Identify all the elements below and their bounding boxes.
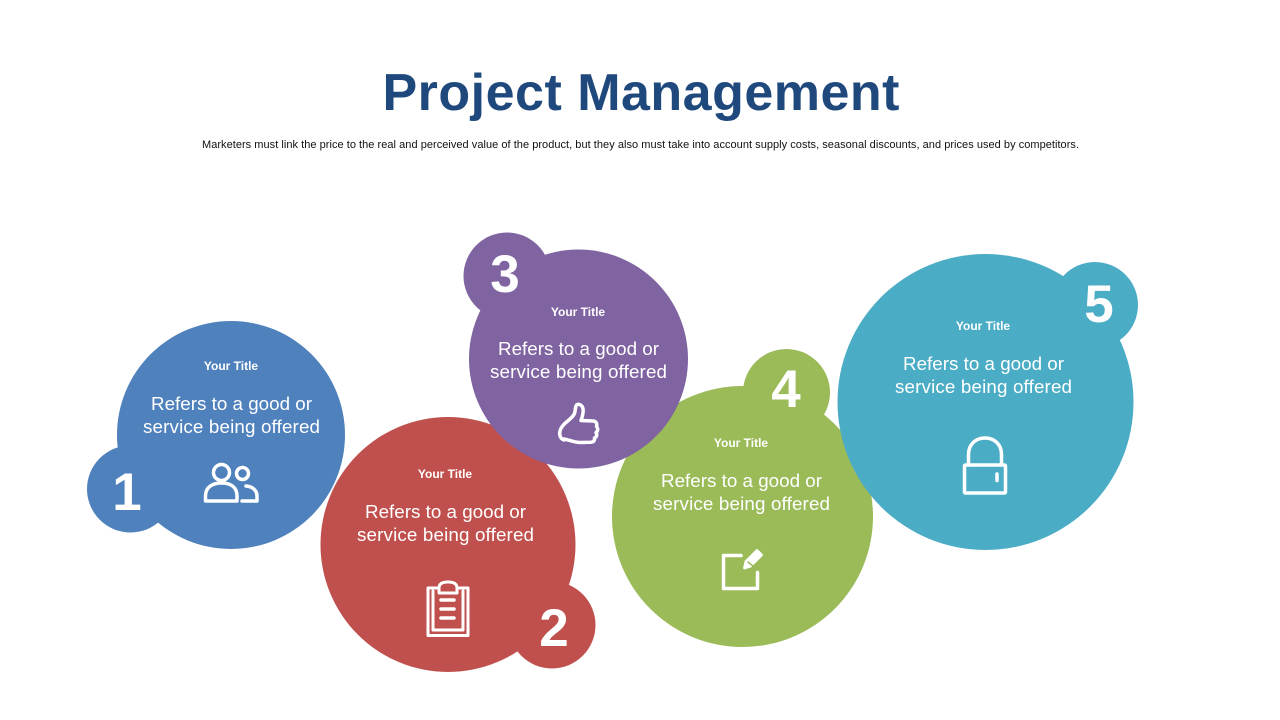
icon: clipboard [428, 582, 468, 636]
icon: thumbs up [560, 404, 598, 442]
text 3: Refers to a good or [498, 338, 659, 359]
text 2: Refers to a good or [365, 501, 526, 522]
text 2 [357, 501, 534, 545]
text 3: service being offered [490, 361, 667, 382]
text 1: Refers to a good or [151, 393, 312, 414]
text 4 [653, 470, 830, 514]
bubble 3: purple [464, 232, 688, 468]
text 1 [143, 393, 320, 437]
text 5 [895, 353, 1072, 397]
number 2: 2 [539, 599, 569, 658]
text 1: service being offered [143, 416, 320, 437]
number 4: 4 [771, 360, 801, 419]
text 4: service being offered [653, 493, 830, 514]
text 5: Refers to a good or [903, 353, 1064, 374]
bubble 5: teal [838, 254, 1138, 550]
bubble 1: blue [87, 321, 345, 549]
text 4: Refers to a good or [661, 470, 822, 491]
number 5: 5 [1084, 275, 1114, 334]
bubble 4: green [612, 349, 873, 647]
number 1: 1 [112, 463, 142, 522]
text 5: service being offered [895, 376, 1072, 397]
icon: people [206, 464, 257, 501]
heading 5: Your Title [956, 319, 1010, 333]
subtitle: Marketers must link the price to the real and perceived value of the product, but they also must take into account supply costs, seasonal discounts, and prices used by competitors. [202, 139, 1079, 151]
heading 3: Your Title [551, 305, 605, 319]
icon: note and pencil [724, 550, 762, 588]
heading 2: Your Title [418, 467, 472, 481]
heading 1: Your Title [204, 359, 258, 373]
title: Project Management [382, 64, 900, 122]
text 2: service being offered [357, 524, 534, 545]
bubble 2: red [320, 417, 596, 672]
number 3: 3 [490, 245, 520, 304]
icon: padlock [964, 438, 1006, 493]
text 3 [490, 338, 667, 382]
heading 4: Your Title [714, 436, 768, 450]
